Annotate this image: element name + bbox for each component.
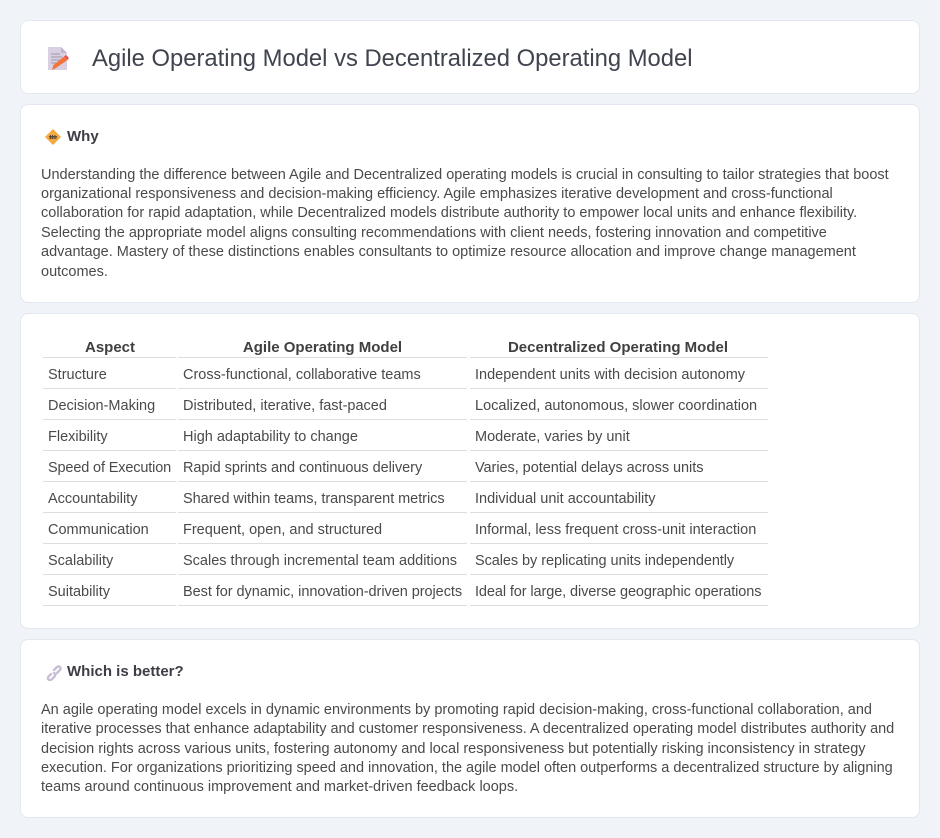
text: which is better paragraph: decision rights across various units, fostering autonomy and local responsiveness but potentially risking inconsistency in strategy [41,741,866,757]
row: accountability [48,491,656,507]
panel: which is better [20,639,920,818]
text: which is better paragraph [41,702,894,795]
row: decision-making: Distributed, iterative, fast-paced [183,398,387,414]
panel: why [20,104,920,303]
text: which is better paragraph: teams around continuous improvement and market-driven feedback loops. [41,779,518,795]
title: Agile Operating Model vs Decentralized Operating Model [92,45,693,72]
heading: which is better: Which is better? [67,663,184,680]
row: suitability: Best for dynamic, innovation-driven projects [183,584,462,600]
row: scalability: Scales through incremental team additions [183,553,457,569]
row: speed of execution [48,460,703,476]
row: communication: Communication [48,522,149,538]
row: communication: Informal, less frequent cross-unit interaction [475,522,756,538]
row: speed of execution: Speed of Execution [48,460,171,476]
row: scalability: Scalability [48,553,113,569]
row: flexibility: Flexibility [48,429,108,445]
text: which is better paragraph: execution. For organizations prioritizing speed and innovation, the agile model often outperforms a decentralized structure by aligning [41,760,893,776]
text: why paragraph: outcomes. [41,264,108,280]
row: speed of execution: Rapid sprints and continuous delivery [183,460,422,476]
row: communication: Frequent, open, and structured [183,522,382,538]
row: decision-making: Decision-Making [48,398,155,414]
row: suitability: Ideal for large, diverse geographic operations [475,584,761,600]
heading: why: Why [67,128,99,145]
row: speed of execution: Varies, potential delays across units [475,460,703,476]
text: why paragraph: Understanding the difference between Agile and Decentralized operating models is crucial in consulting to tailor strategies that boost [41,167,889,183]
row: structure [48,367,745,383]
row: suitability [48,584,761,600]
text: which is better paragraph: iterative processes that enhance adaptability and customer responsiveness. A decentralized operating model distributes authority and [41,721,894,737]
table header [85,339,728,356]
text: why paragraph: collaboration for rapid adaptation, while Decentralized models distribute authority to empower local units and enhance flexibility. [41,205,857,221]
row: communication [48,522,756,538]
text: why paragraph [41,167,889,280]
icon: link [46,665,62,681]
row: accountability: Accountability [48,491,137,507]
table header: Agile Operating Model [243,339,402,356]
text: why paragraph: advantage. Mastery of these distinctions enables consultants to optimize resource allocation and improve change management [41,244,856,260]
text: why paragraph: organizational responsiveness and decision-making efficiency. Agile emphasizes iterative development and cross-functional [41,186,833,202]
table header: Decentralized Operating Model [508,339,728,356]
row: structure: Cross-functional, collaborative teams [183,367,421,383]
row: scalability [48,553,734,569]
panel: comparison table [20,313,920,629]
panel: header [20,20,920,94]
text: which is better paragraph: An agile operating model excels in dynamic environments by promoting rapid decision-making, cross-functional collaboration, and [41,702,872,718]
row: flexibility: Moderate, varies by unit [475,429,630,445]
icon: document with pencil [48,47,69,70]
row: flexibility: High adaptability to change [183,429,358,445]
icon: diamond sign [45,129,61,145]
row: accountability: Individual unit accountability [475,491,656,507]
row: flexibility [48,429,630,445]
row: decision-making: Localized, autonomous, slower coordination [475,398,757,414]
row: accountability: Shared within teams, transparent metrics [183,491,445,507]
row: suitability: Suitability [48,584,110,600]
row: decision-making [48,398,757,414]
row: structure: Structure [48,367,107,383]
text: why paragraph: Selecting the appropriate model aligns consulting recommendations with client needs, fostering innovation and competitive [41,225,827,241]
row: scalability: Scales by replicating units independently [475,553,734,569]
table header: Aspect [85,339,135,356]
row: structure: Independent units with decision autonomy [475,367,745,383]
